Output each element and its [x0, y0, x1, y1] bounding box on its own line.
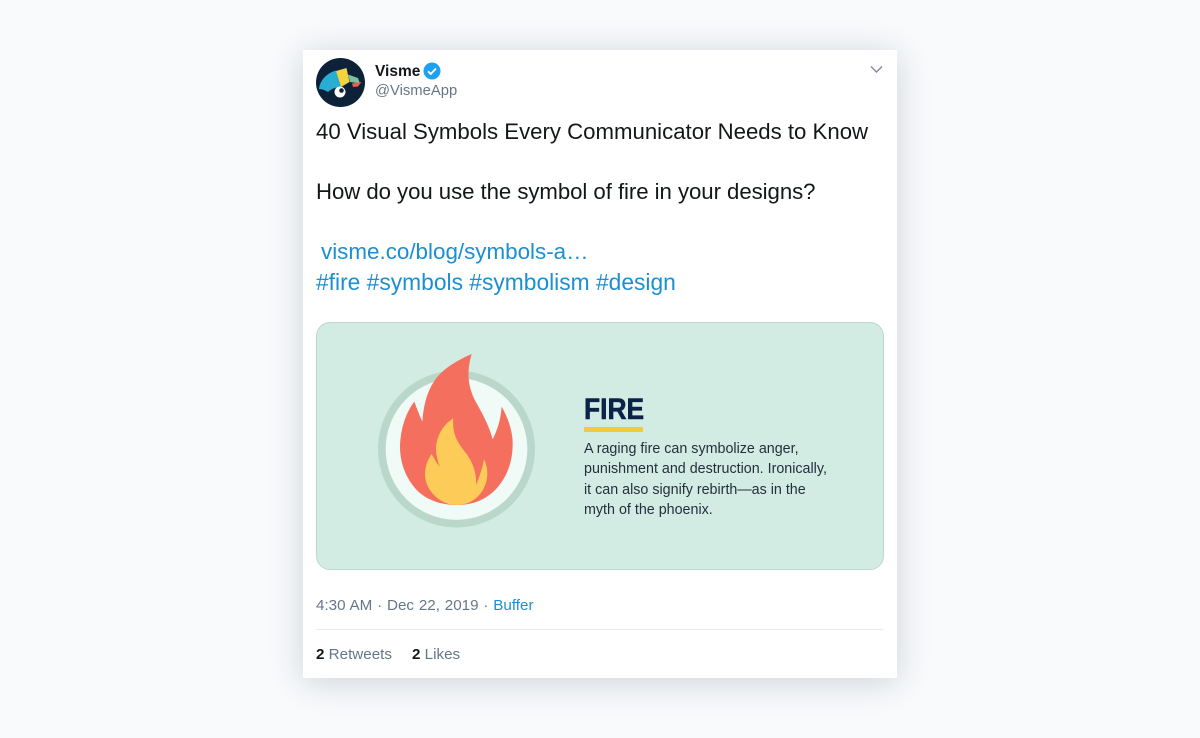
description: punishment and destruction. Ironically, — [584, 461, 827, 477]
tweet text: visme.co/blog/symbols-a… — [321, 239, 589, 264]
description: myth of the phoenix. — [584, 502, 713, 518]
tweet text: 40 Visual Symbols Every Communicator Needs to Know — [316, 119, 868, 144]
description: it can also signify rebirth—as in the — [584, 482, 806, 498]
handle: @VismeApp — [375, 83, 457, 99]
tweet card — [303, 50, 897, 678]
description — [584, 441, 827, 518]
icon: flame in circle — [378, 354, 535, 528]
heading: FIRE: FIRE — [584, 393, 644, 426]
engagement stats: 2 Retweets 2 Likes — [316, 646, 460, 663]
chevron — [870, 66, 882, 73]
tweet text: #fire #symbols #symbolism #design — [316, 269, 676, 295]
tweet text — [316, 119, 868, 295]
yellow underline — [584, 427, 643, 432]
display name: Visme — [375, 63, 420, 80]
verified badge — [424, 62, 440, 80]
timestamp and source: 4:30 AM · Dec 22, 2019 · Buffer — [316, 597, 534, 614]
tweet text: How do you use the symbol of fire in your designs? — [316, 179, 815, 204]
description: A raging fire can symbolize anger, — [584, 441, 799, 457]
media card: fire — [316, 322, 884, 570]
avatar: Visme logo — [316, 58, 365, 107]
